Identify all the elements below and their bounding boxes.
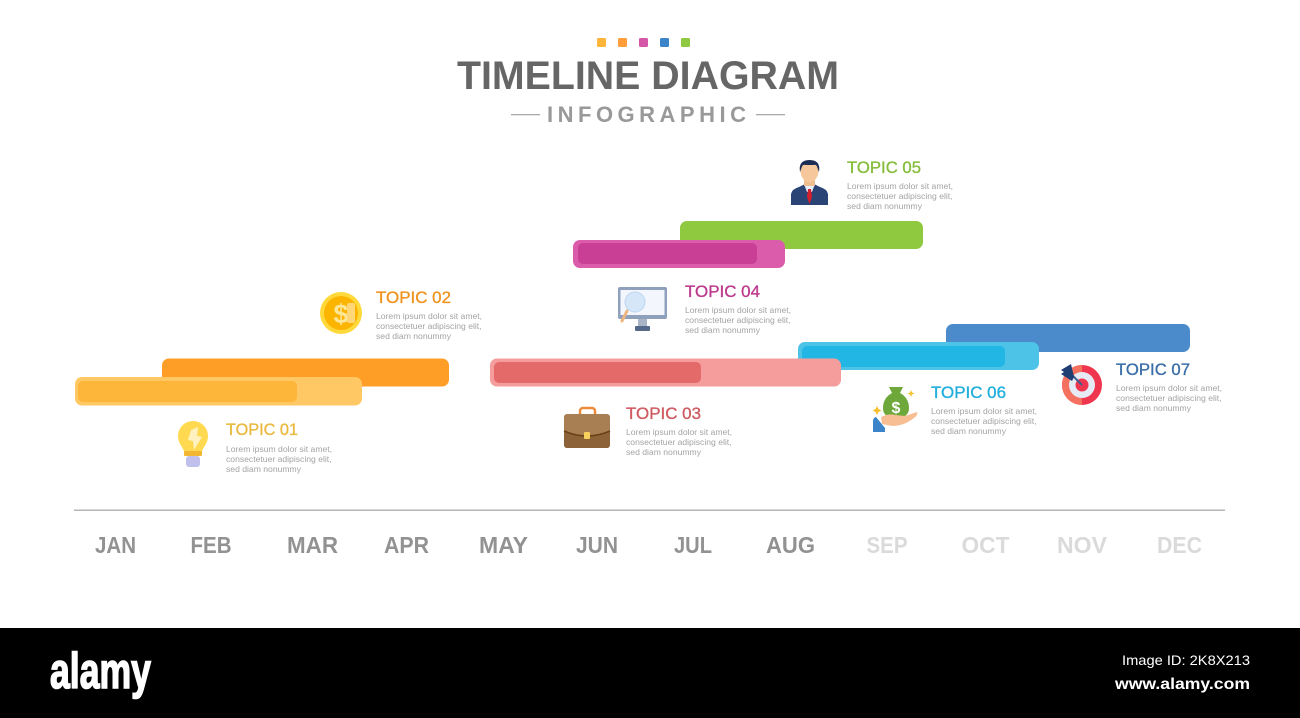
text: topic 02: sed diam nonummy — [376, 331, 452, 341]
colour dots — [597, 38, 690, 47]
icon: money bag in hand — [872, 387, 917, 432]
bar end: topic 03 overlap — [798, 358, 841, 386]
text: topic 05: Lorem ipsum dolor sit amet, — [847, 181, 953, 191]
text: topic 03: sed diam nonummy — [626, 447, 702, 457]
text: topic 03: consectetuer adipiscing elit, — [626, 437, 732, 447]
image id: Image ID: 2K8X213 — [1122, 652, 1250, 668]
text: topic 06: consectetuer adipiscing elit, — [931, 416, 1037, 426]
icon: coin: $ — [333, 299, 349, 329]
text: topic 06 — [931, 383, 1037, 436]
month labels: APR — [384, 532, 429, 558]
text: topic 06: sed diam nonummy — [931, 426, 1007, 436]
text: topic 05: consectetuer adipiscing elit, — [847, 191, 953, 201]
text: topic 01 — [226, 420, 332, 474]
month labels: JUN — [576, 532, 618, 558]
bar: topic 05 — [680, 221, 923, 249]
icon: briefcase — [564, 408, 610, 448]
month labels: MAR — [287, 532, 338, 558]
bar: topic 06 — [798, 342, 1039, 370]
month labels: SEP — [866, 532, 908, 558]
text: topic 07: TOPIC 07 — [1116, 360, 1190, 379]
text: topic 03: Lorem ipsum dolor sit amet, — [626, 427, 732, 437]
text: topic 01: sed diam nonummy — [226, 464, 302, 474]
text: topic 06: Lorem ipsum dolor sit amet, — [931, 406, 1037, 416]
title: TIMELINE DIAGRAM — [457, 54, 839, 98]
month labels: NOV — [1057, 532, 1108, 558]
text: topic 02: TOPIC 02 — [376, 288, 451, 307]
text: topic 02: Lorem ipsum dolor sit amet, — [376, 311, 482, 321]
text: topic 04: sed diam nonummy — [685, 325, 761, 335]
icon: light bulb — [178, 421, 208, 467]
bar: topic 02 — [162, 358, 449, 386]
icon: coin — [320, 292, 362, 334]
text: topic 04: consectetuer adipiscing elit, — [685, 315, 791, 325]
text: topic 06: TOPIC 06 — [931, 383, 1006, 402]
text: topic 02 — [376, 288, 482, 341]
month labels: OCT — [962, 532, 1010, 558]
timeline axis — [74, 510, 1225, 511]
bar: topic 03 — [490, 358, 841, 386]
text: topic 07: Lorem ipsum dolor sit amet, — [1116, 383, 1222, 393]
month labels — [95, 532, 1202, 558]
bar: topic 01 — [75, 377, 362, 406]
text: topic 07 — [1116, 360, 1222, 413]
text: topic 03: TOPIC 03 — [626, 404, 701, 423]
text: topic 05: sed diam nonummy — [847, 201, 923, 211]
alamy logo: alamy — [50, 643, 151, 699]
month labels: FEB — [190, 532, 232, 558]
text: topic 07: consectetuer adipiscing elit, — [1116, 393, 1222, 403]
icon: businessman — [791, 160, 828, 205]
text: topic 03 — [626, 404, 732, 457]
text: topic 01: TOPIC 01 — [226, 420, 298, 439]
text: topic 04: TOPIC 04 — [685, 282, 760, 301]
text: topic 04 — [685, 282, 791, 335]
text: topic 05: TOPIC 05 — [847, 158, 921, 177]
text: topic 01: Lorem ipsum dolor sit amet, — [226, 444, 332, 454]
month labels: JAN — [95, 532, 136, 558]
month labels: AUG — [766, 532, 815, 558]
subtitle: INFOGRAPHIC — [547, 102, 746, 127]
bar: topic 04 — [573, 240, 785, 268]
month labels: MAY — [479, 532, 528, 558]
footer band — [0, 628, 1300, 718]
icon: target with dart — [1061, 364, 1102, 405]
month labels: JUL — [674, 532, 712, 558]
website: www.alamy.com — [1114, 676, 1250, 693]
bar: topic 07 — [946, 324, 1190, 352]
text: topic 05 — [847, 158, 953, 211]
text: topic 04: Lorem ipsum dolor sit amet, — [685, 305, 791, 315]
text: topic 07: sed diam nonummy — [1116, 403, 1192, 413]
icon: monitor with magnifier — [618, 287, 667, 331]
text: topic 01: consectetuer adipiscing elit, — [226, 454, 332, 464]
text: topic 02: consectetuer adipiscing elit, — [376, 321, 482, 331]
icon: money bag in hand: $ — [892, 400, 901, 417]
month labels: DEC — [1157, 532, 1202, 558]
